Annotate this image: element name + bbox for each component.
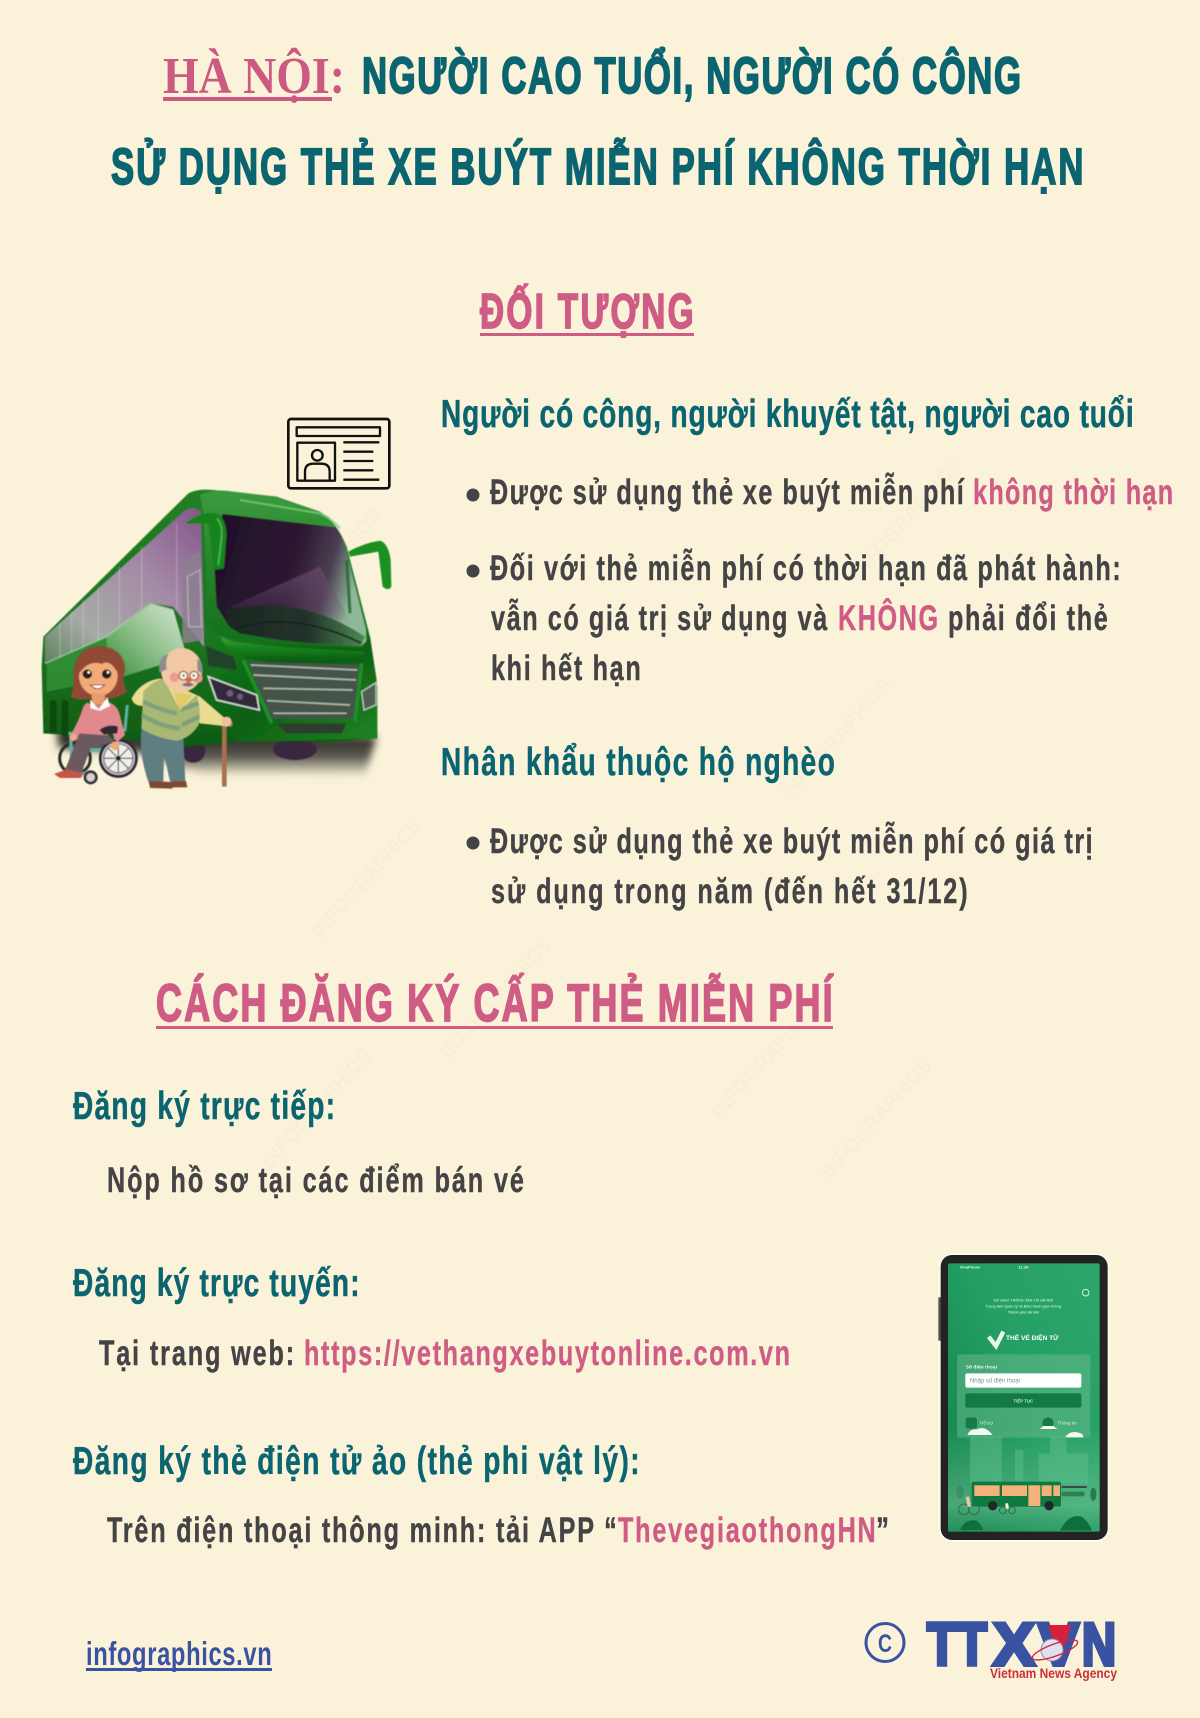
heading: đối tượng: ĐỐI TƯỢNG	[480, 282, 694, 339]
block: đăng ký trực tiếp	[73, 1085, 524, 1200]
elderly man with cane	[132, 648, 233, 789]
wheelchair	[60, 705, 136, 783]
logo: TTXVN: Vietnam News Agency	[990, 1665, 1117, 1681]
app header text: 11:39	[1018, 1265, 1029, 1270]
illustration: green bus with elderly and wheelchair users	[42, 490, 391, 789]
app logo: THẺ VÉ ĐIỆN TỬ	[1006, 1333, 1059, 1342]
bullet 3: Được sử dụng thẻ xe buýt miễn phí có giá trị	[490, 821, 1093, 861]
login form: Thông tin	[1057, 1420, 1077, 1425]
bullet 2: Đối với thẻ miễn phí có thời hạn đã phát hành:	[490, 548, 1121, 588]
login form: Nhập số điện thoại	[970, 1379, 1020, 1385]
block: thẻ điện tử ảo: ”	[876, 1511, 889, 1550]
bullet 3: sử dụng trong năm (đến hết 31/12)	[491, 872, 968, 911]
logo: TTXVN: V	[1038, 1611, 1079, 1678]
clouds	[967, 1426, 1083, 1437]
text: INFOGRAPHICS	[307, 815, 426, 943]
title: HÀ NỘI:	[163, 47, 345, 105]
bullet 2: KHÔNG	[838, 597, 938, 638]
bullet 2	[466, 548, 1121, 688]
bullet 1: không thời hạn	[973, 473, 1173, 512]
icon: ID card	[288, 419, 389, 488]
login form	[957, 1354, 1090, 1438]
bus body	[42, 490, 391, 747]
bullet 1	[466, 472, 1173, 512]
block: đăng ký trực tiếp: Đăng ký trực tiếp:	[73, 1085, 335, 1128]
login form: Số điện thoại	[966, 1364, 998, 1371]
block: đăng ký trực tiếp: Nộp hồ sơ tại các điểm bán vé	[107, 1161, 524, 1200]
woman in wheelchair	[54, 646, 136, 783]
app header text: SỞ GIAO THÔNG VẬN TẢI HÀ NỘI	[994, 1297, 1053, 1302]
block: đăng ký trực tuyến	[73, 1262, 790, 1373]
section: người có công	[441, 393, 1173, 688]
text: INFOGRAPHICS	[267, 505, 386, 633]
block: đăng ký trực tuyến: https://vethangxebuytonline.com.vn	[304, 1334, 790, 1373]
front body band	[207, 633, 377, 742]
bus wheels	[181, 739, 317, 763]
text: INFOGRAPHICS	[257, 1045, 376, 1173]
bullet 3	[466, 821, 1093, 911]
bullet 2: vẫn có giá trị sử dụng và	[491, 598, 828, 638]
bullet 2: khi hết hạn	[491, 649, 641, 688]
cyclists	[959, 1497, 1015, 1515]
text: INFOGRAPHICS	[847, 455, 966, 583]
foreground hills	[960, 1516, 1092, 1531]
bus illustration	[972, 1482, 1087, 1510]
app header text	[960, 1265, 1061, 1314]
section: nhân khẩu hộ nghèo	[441, 741, 1093, 911]
phone app mockup	[938, 1253, 1109, 1542]
login form: Hỗ trợ	[980, 1419, 993, 1425]
app header text: VinaPhone	[960, 1265, 981, 1270]
city skyline	[970, 1437, 1088, 1483]
section: nhân khẩu hộ nghèo: Nhân khẩu thuộc hộ nghèo	[441, 741, 835, 784]
text: INFOGRAPHICS	[707, 995, 826, 1123]
title: NGƯỜI CAO TUỔI, NGƯỜI CÓ CÔNG	[362, 45, 1021, 105]
mirrors	[185, 513, 227, 570]
block: thẻ điện tử ảo: Trên điện thoại thông minh: tải APP “	[107, 1511, 617, 1550]
block: thẻ điện tử ảo: ThevegiaothongHN	[618, 1511, 876, 1550]
login form: TIẾP TỤC	[1014, 1398, 1033, 1403]
block: thẻ điện tử ảo	[73, 1440, 889, 1550]
logo: TTXVN	[866, 1611, 1117, 1681]
bullet 1: Được sử dụng thẻ xe buýt miễn phí	[490, 472, 965, 512]
copyright mark: C	[878, 1630, 892, 1658]
headlights	[208, 677, 259, 710]
bus shadow	[57, 730, 377, 777]
heading: cách đăng ký: CÁCH ĐĂNG KÝ CẤP THẺ MIỄN PHÍ	[156, 972, 834, 1033]
logo: TTXVN: N	[1082, 1611, 1116, 1678]
text: INFOGRAPHICS	[437, 935, 556, 1063]
copyright mark	[866, 1624, 904, 1662]
front roof frame	[200, 491, 373, 660]
text: INFOGRAPHICS	[777, 675, 896, 803]
logo: TTXVN: TT	[927, 1611, 987, 1678]
block: đăng ký trực tuyến: Đăng ký trực tuyến:	[73, 1262, 360, 1305]
block: đăng ký trực tuyến: Tại trang web:	[99, 1334, 294, 1373]
grille	[248, 662, 360, 718]
logo: TTXVN: X	[993, 1611, 1035, 1678]
app header text: Trung tâm Quản lý và Điều hành giao thông	[986, 1304, 1061, 1308]
app logo	[989, 1332, 1059, 1346]
windshield	[213, 514, 366, 646]
text: INFOGRAPHICS	[817, 1055, 936, 1183]
bullet 2: phải đổi thẻ	[948, 599, 1108, 638]
source link: infographics.vn	[86, 1636, 272, 1673]
title: SỬ DỤNG THẺ XE BUÝT MIỄN PHÍ KHÔNG THỜI HẠN	[111, 136, 1083, 196]
title	[111, 45, 1083, 196]
section: người có công: Người có công, người khuyết tật, người cao tuổi	[441, 393, 1134, 436]
app header text: Thành phố Hà Nội	[1008, 1310, 1039, 1314]
block: thẻ điện tử ảo: Đăng ký thẻ điện tử ảo (thẻ phi vật lý):	[73, 1440, 640, 1483]
